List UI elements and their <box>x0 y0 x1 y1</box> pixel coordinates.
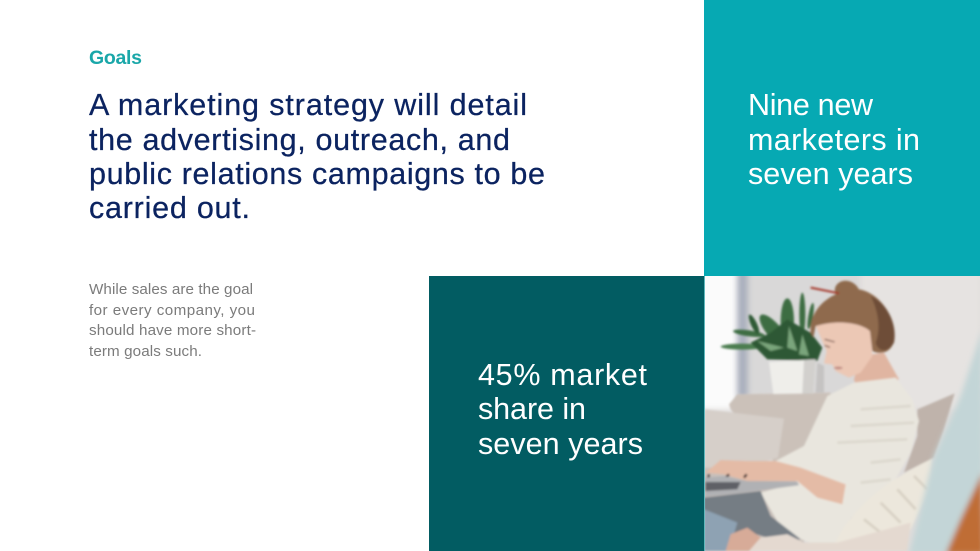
plant <box>721 293 815 352</box>
neck and face <box>853 352 900 384</box>
body text: short-term goals: should have more short- <box>89 322 256 339</box>
panel: market share <box>429 276 704 551</box>
lips <box>834 367 843 369</box>
body text: short-term goals: for every company, you <box>89 302 255 319</box>
photo: woman working on laptop on a sofa <box>697 269 980 551</box>
panel text: nine new marketers: Nine new <box>748 88 874 122</box>
panel text: nine new marketers <box>748 88 920 191</box>
panel: nine new marketers <box>704 0 980 276</box>
heading: marketing strategy statement: carried out. <box>89 191 250 225</box>
jeans <box>705 490 800 540</box>
panel text: market share <box>478 358 648 461</box>
panel text: nine new marketers: seven years <box>748 157 913 191</box>
panel text: market share: 45% market <box>478 358 648 392</box>
cushion left <box>705 409 784 469</box>
body text: short-term goals: While sales are the goal <box>89 281 253 298</box>
knitted blanket <box>848 460 931 539</box>
cushion right <box>904 393 955 473</box>
panel text: market share: share in <box>478 392 586 426</box>
sweater <box>761 378 919 544</box>
leg <box>726 528 761 551</box>
hair <box>811 281 894 353</box>
panel text: nine new marketers: marketers in <box>748 123 920 157</box>
sofa back <box>729 393 831 466</box>
eyes <box>825 339 835 347</box>
body text: short-term goals <box>89 281 256 360</box>
label: Goals: Goals <box>89 47 142 69</box>
teal edge <box>704 276 705 551</box>
panel text: market share: seven years <box>478 427 643 461</box>
body text: short-term goals: term goals such. <box>89 343 202 360</box>
heading: marketing strategy statement <box>89 88 545 225</box>
heading: marketing strategy statement: the advertising, outreach, and <box>89 123 510 157</box>
laptop <box>705 476 799 497</box>
blurred foreground object <box>909 329 980 551</box>
forearm and hands <box>706 460 846 504</box>
pot <box>769 359 816 394</box>
heading: marketing strategy statement: public relations campaigns to be <box>89 157 545 191</box>
heading: marketing strategy statement: A marketing strategy will detail <box>89 88 527 122</box>
